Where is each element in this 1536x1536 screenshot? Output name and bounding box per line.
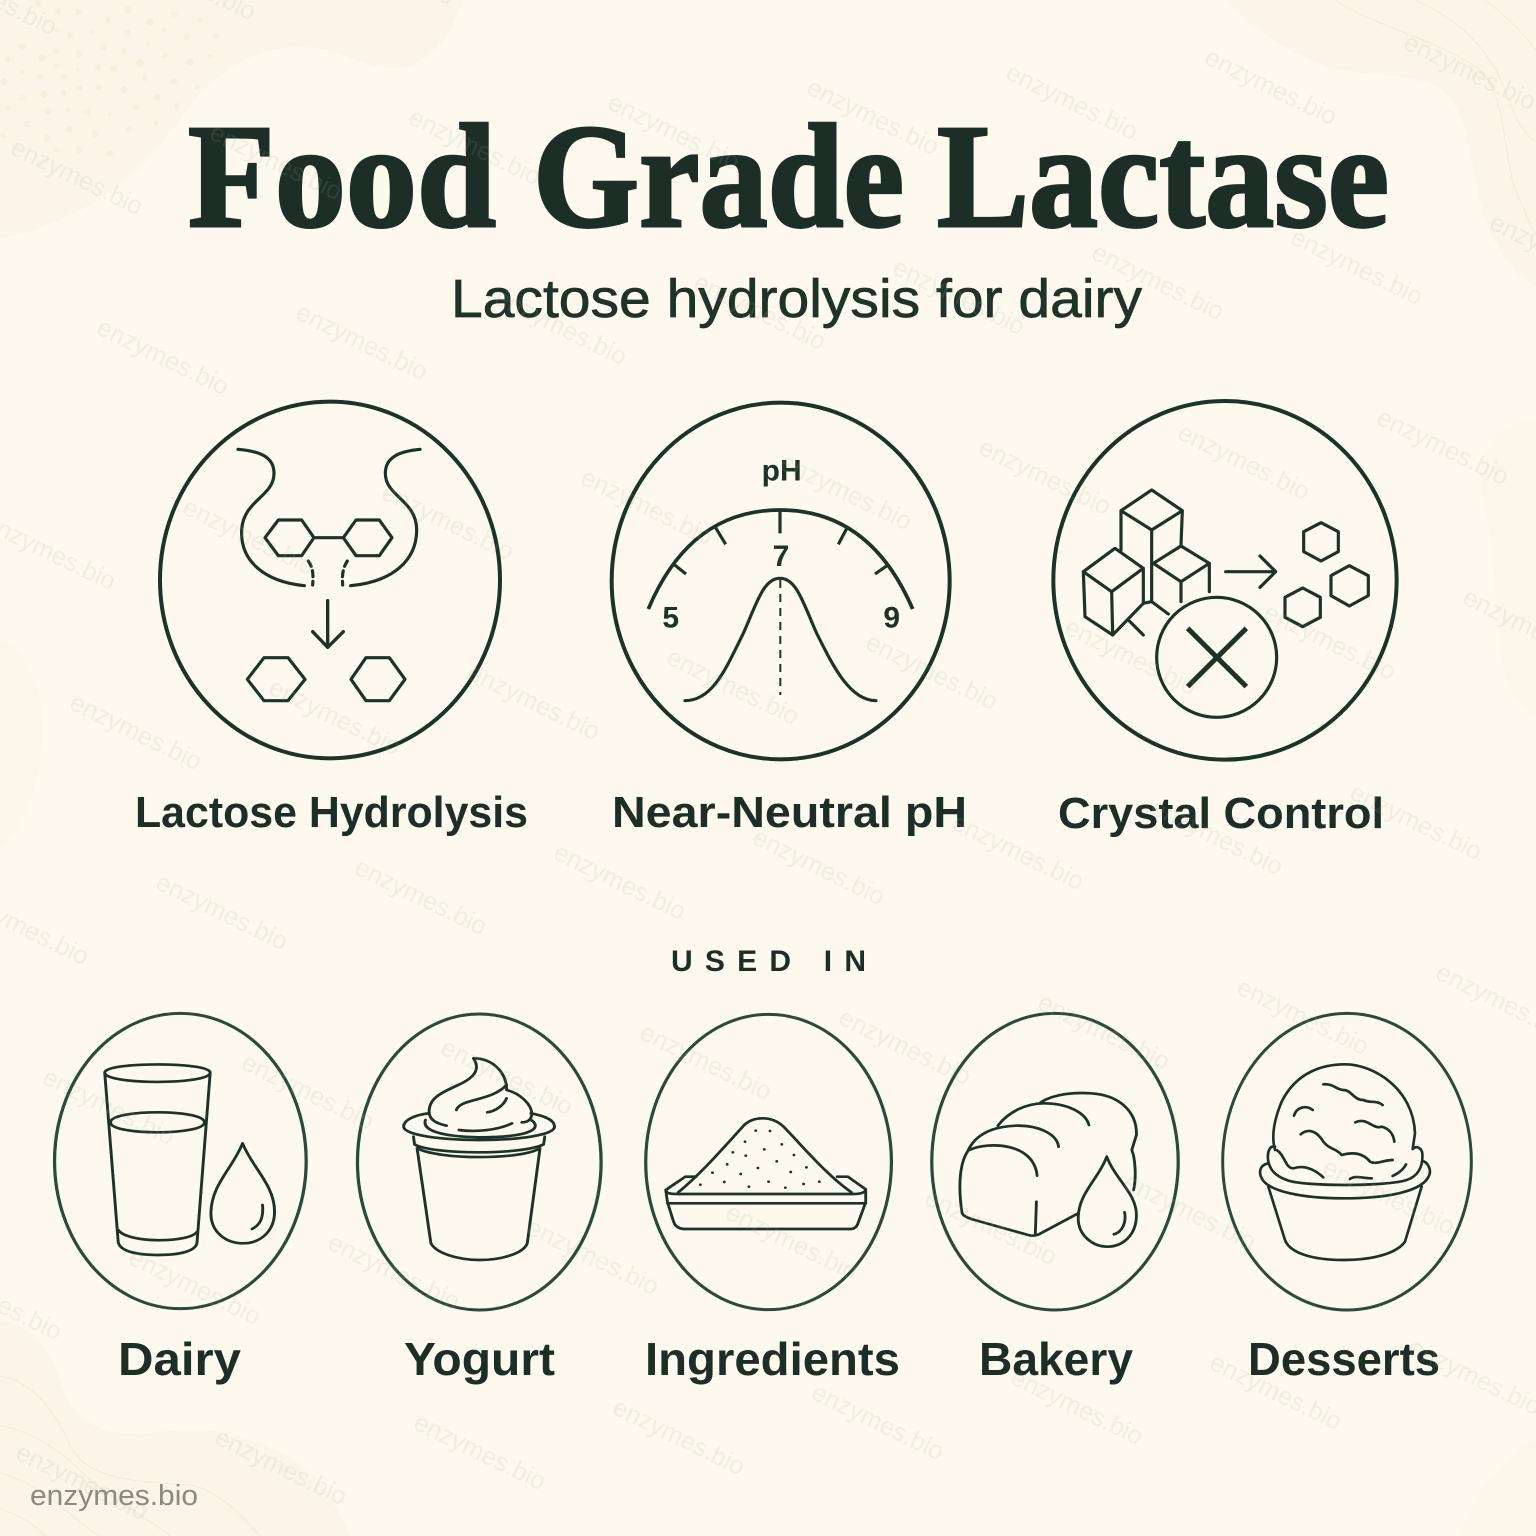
arrow down	[313, 601, 343, 647]
title: Grade	[533, 95, 904, 259]
watermark pattern: enzymes.bio	[1119, 1168, 1260, 1256]
powder pile	[678, 1118, 851, 1192]
watermark pattern: enzymes.bio	[1060, 613, 1201, 701]
gauge arc	[648, 510, 913, 609]
watermark pattern: enzymes.bio	[264, 673, 405, 761]
watermark pattern: enzymes.bio	[1372, 403, 1513, 491]
watermark pattern: enzymes.bio	[178, 493, 319, 581]
watermark pattern: enzymes.bio	[947, 808, 1088, 896]
panel: crystal control icon	[1053, 401, 1397, 760]
watermark pattern: enzymes.bio	[807, 1378, 948, 1466]
watermark pattern: enzymes.bio	[888, 253, 1029, 341]
watermark pattern: enzymes.bio	[1259, 598, 1400, 686]
watermark pattern: enzymes.bio	[205, 118, 346, 206]
label: ingredients: Ingredients	[645, 1333, 900, 1385]
watermark pattern: enzymes.bio	[210, 1423, 351, 1511]
bakery drop	[1078, 1157, 1136, 1247]
watermark pattern: enzymes.bio	[237, 1048, 378, 1136]
dessert bowl	[1260, 1161, 1430, 1260]
bread loaf	[960, 1093, 1136, 1236]
gauge ticks	[673, 510, 889, 574]
panel: lactose hydrolysis icon	[160, 402, 500, 758]
watermark pattern: enzymes.bio	[6, 133, 147, 221]
watermark pattern: enzymes.bio	[576, 463, 717, 551]
watermark pattern: enzymes.bio	[1087, 238, 1228, 326]
small crystals	[1285, 523, 1368, 627]
watermark pattern: enzymes.bio	[549, 838, 690, 926]
watermark pattern: enzymes.bio	[802, 73, 943, 161]
center dashed line	[777, 580, 783, 695]
label: bakery: Bakery	[979, 1333, 1133, 1385]
watermark pattern: enzymes.bio	[861, 628, 1002, 716]
ice cream scoop	[1268, 1064, 1422, 1185]
milk drop	[211, 1143, 275, 1243]
watermark pattern: enzymes.bio	[404, 103, 545, 191]
enzyme pocket	[238, 449, 420, 586]
title: Lactase	[937, 95, 1389, 259]
watermark pattern: enzymes.bio	[377, 478, 518, 566]
watermark pattern: enzymes.bio	[834, 1003, 975, 1091]
bell curve	[685, 578, 876, 701]
source credit: enzymes.bio	[30, 1480, 198, 1512]
panel: dairy icon	[55, 1013, 306, 1309]
panel: ingredients icon	[646, 1014, 891, 1310]
watermark pattern: enzymes.bio	[1318, 1153, 1459, 1241]
watermark pattern: enzymes.bio	[689, 268, 830, 356]
pH labels: 5	[662, 601, 679, 634]
title: Food	[188, 95, 496, 259]
panel: bakery icon	[932, 1013, 1178, 1310]
watermark pattern: enzymes.bio	[323, 1228, 464, 1316]
panel: near-neutral pH icon	[612, 403, 950, 759]
panel: desserts icon	[1223, 1013, 1471, 1310]
watermark pattern: enzymes.bio	[350, 853, 491, 941]
cleavage dashes	[308, 561, 347, 585]
watermark pattern: enzymes.bio	[1001, 58, 1142, 146]
pH labels: pH	[762, 454, 802, 487]
watermark pattern: enzymes.bio	[662, 643, 803, 731]
pH labels: 7	[773, 540, 789, 573]
milk glass	[105, 1064, 210, 1255]
arrow right	[1226, 556, 1276, 587]
watermark pattern: enzymes.bio	[124, 1243, 265, 1331]
watermark pattern: enzymes.bio	[721, 1198, 862, 1286]
label: desserts: Desserts	[1248, 1333, 1440, 1385]
watermark pattern: enzymes.bio	[409, 1408, 550, 1496]
glucose and galactose	[247, 658, 405, 701]
watermark pattern: enzymes.bio	[775, 448, 916, 536]
powder specks	[699, 1129, 821, 1189]
pH labels	[662, 454, 900, 634]
watermark pattern: enzymes.bio	[1205, 1348, 1346, 1436]
cream swirl	[429, 1058, 532, 1131]
watermark pattern: enzymes.bio	[1033, 988, 1174, 1076]
pH labels: 9	[883, 601, 900, 634]
label: crystal control: Crystal Control	[1058, 789, 1384, 838]
yogurt cup	[404, 1113, 555, 1260]
watermark pattern: enzymes.bio	[92, 313, 233, 401]
watermark pattern: enzymes.bio	[1232, 973, 1373, 1061]
watermark pattern: enzymes.bio	[11, 1438, 152, 1526]
panel: yogurt icon	[357, 1014, 601, 1310]
watermark pattern: enzymes.bio	[38, 1063, 179, 1151]
watermark pattern: enzymes.bio	[748, 823, 889, 911]
label: yogurt: Yogurt	[404, 1333, 555, 1385]
watermark pattern: enzymes.bio	[151, 868, 292, 956]
label: near-neutral pH: Near-Neutral pH	[612, 788, 967, 837]
tray	[666, 1177, 866, 1229]
label: lactose hydrolysis: Lactose Hydrolysis	[135, 788, 528, 837]
watermark pattern: enzymes.bio	[635, 1018, 776, 1106]
watermark pattern: enzymes.bio	[490, 283, 631, 371]
watermark pattern: enzymes.bio	[291, 298, 432, 386]
no crystal symbol	[1157, 597, 1277, 717]
watermark pattern: enzymes.bio	[608, 1393, 749, 1481]
lactose molecule	[265, 520, 392, 556]
subtitle: Lactose hydrolysis for dairy	[451, 269, 1142, 329]
watermark pattern: enzymes.bio	[1286, 223, 1427, 311]
watermark pattern: enzymes.bio	[974, 433, 1115, 521]
watermark pattern: enzymes.bio	[65, 688, 206, 776]
watermark pattern: enzymes.bio	[463, 658, 604, 746]
watermark pattern: enzymes.bio	[1200, 43, 1341, 131]
watermark pattern: enzymes.bio	[1173, 418, 1314, 506]
label: dairy: Dairy	[118, 1333, 241, 1385]
watermark pattern: enzymes.bio	[1345, 778, 1486, 866]
title	[188, 95, 1389, 259]
sugar crystals	[1083, 490, 1209, 635]
watermark pattern: enzymes.bio	[1146, 793, 1287, 881]
watermark pattern: enzymes.bio	[1006, 1363, 1147, 1451]
watermark pattern: enzymes.bio	[603, 88, 744, 176]
watermark pattern: enzymes.bio	[436, 1033, 577, 1121]
watermark pattern: enzymes.bio	[920, 1183, 1061, 1271]
watermark pattern: enzymes.bio	[522, 1213, 663, 1301]
section heading: used in: USED IN	[671, 945, 866, 978]
